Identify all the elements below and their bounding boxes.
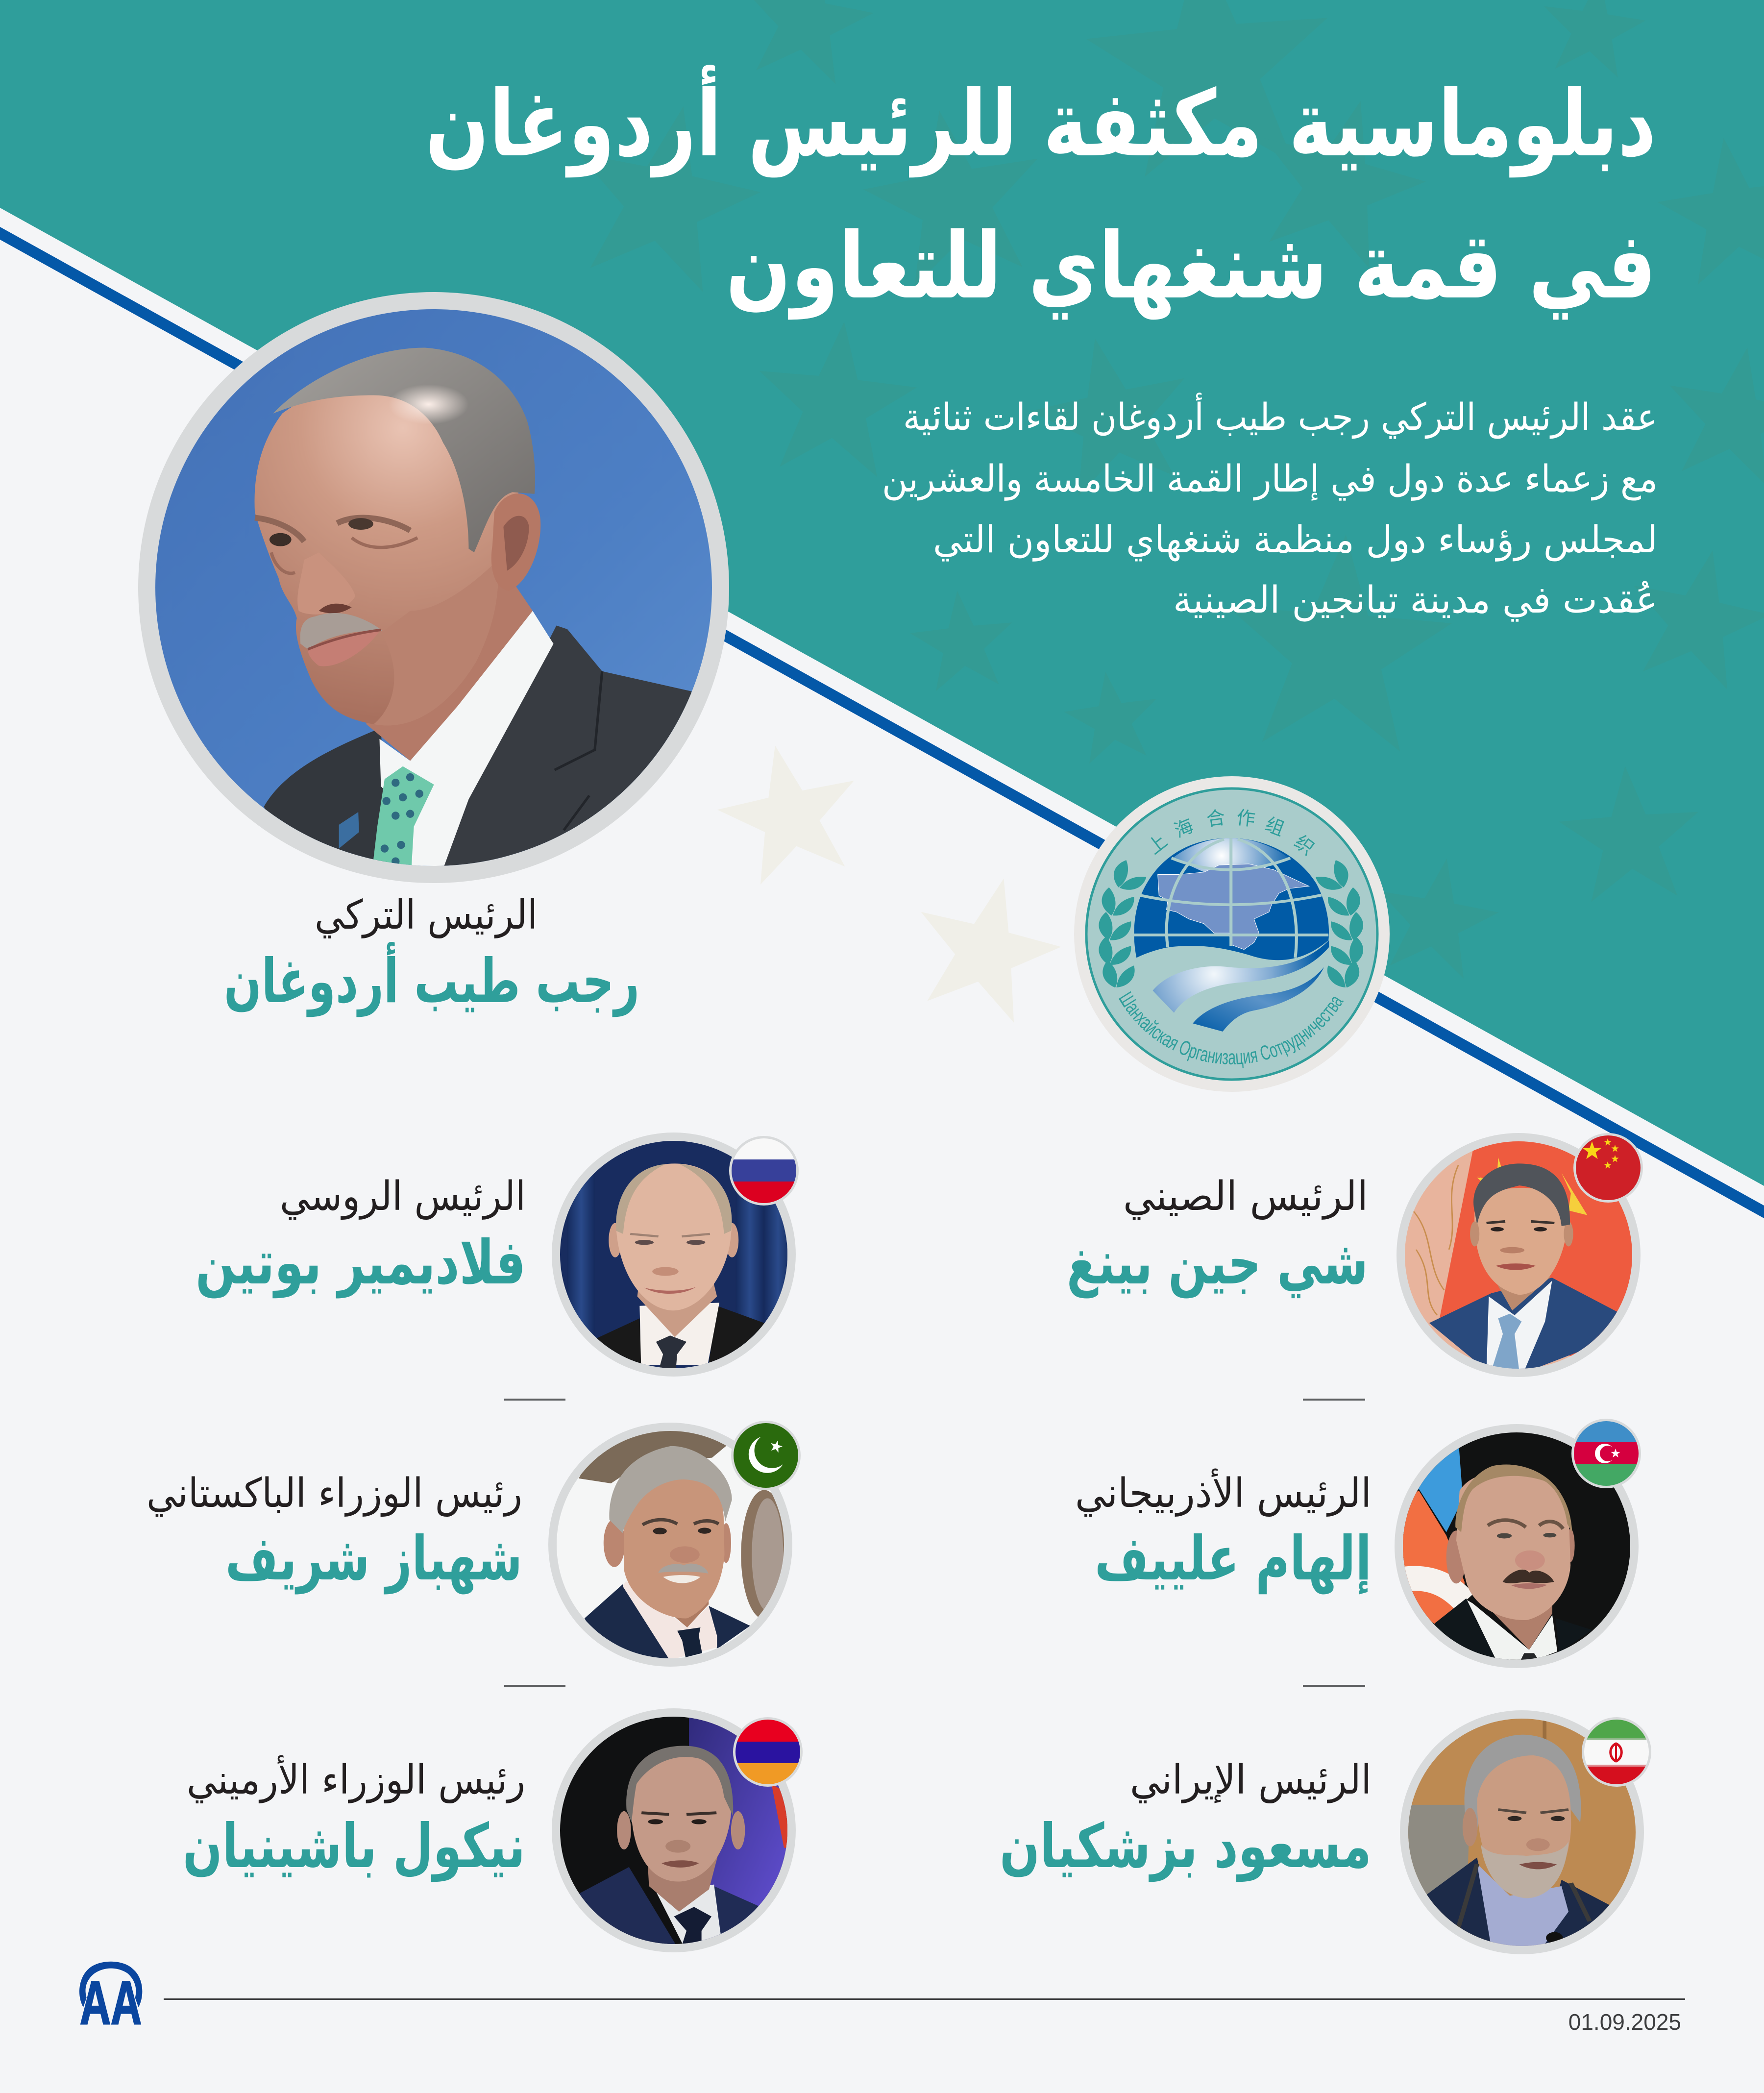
flag: Russia [729, 1136, 799, 1206]
caption: Pashinyan [183, 1755, 525, 1882]
title [425, 65, 1656, 320]
flag: Azerbaijan [1570, 1419, 1644, 1489]
divider [504, 1685, 565, 1687]
caption: Pashinyan: نيكول باشينيان [183, 1811, 525, 1882]
caption: Erdogan: الرئيس التركي [315, 892, 538, 938]
caption: Xi: شي جين بينغ [1067, 1228, 1368, 1299]
date: 01.09.2025 [1568, 2009, 1681, 2035]
person: Pezeshkian [980, 1700, 1676, 1965]
logo: Shanghai Cooperation Organisation: 织 [1290, 827, 1321, 860]
logo: Shanghai Cooperation Organisation: 作 [1235, 802, 1257, 831]
divider [1303, 1399, 1365, 1401]
intro paragraph: لمجلس رؤساء دول منظمة شنغهاي للتعاون التي [933, 517, 1658, 562]
flag: Iran [1582, 1717, 1651, 1787]
portrait: Erdogan [138, 292, 729, 883]
caption: Putin: فلاديمير بوتين [196, 1228, 526, 1299]
caption: Putin [196, 1173, 526, 1299]
flag: Pakistan [731, 1421, 801, 1490]
portrait: Pezeshkian [1393, 1707, 1655, 1956]
logo: Shanghai Cooperation Organisation: 组 [1262, 809, 1289, 841]
caption: Aliyev [1075, 1469, 1372, 1595]
panel: teal header band with stars and diagonal blue line [0, 0, 1764, 1218]
logo: Shanghai Cooperation Organisation: 上 [1141, 827, 1172, 859]
person: Aliyev [1075, 1419, 1641, 1668]
intro paragraph: عقد الرئيس التركي رجب طيب أردوغان لقاءات ثنائية [903, 393, 1658, 439]
divider [504, 1399, 565, 1401]
person: Putin [196, 1133, 799, 1377]
caption: Erdogan [224, 892, 639, 1017]
intro paragraph: عُقدت في مدينة تيانجين الصينية [1173, 578, 1658, 622]
caption: Xi: الرئيس الصيني [1123, 1173, 1368, 1220]
portrait: Putin [548, 1133, 802, 1378]
portrait: Xi [1393, 1133, 1646, 1378]
flag: Armenia [733, 1717, 804, 1788]
caption: Aliyev: الرئيس الأذربيجاني [1075, 1469, 1372, 1517]
logo: Shanghai Cooperation Organisation: Шанхайская Организация Сотрудничества [1119, 991, 1344, 1068]
footer rule [164, 1998, 1685, 2000]
caption: Putin: الرئيس الروسي [280, 1173, 526, 1220]
intro paragraph [882, 393, 1658, 622]
caption: Pezeshkian [1000, 1757, 1372, 1882]
flag: China [1573, 1133, 1643, 1203]
caption: Sharif: شهباز شريف [225, 1524, 522, 1595]
caption: Pezeshkian: مسعود بزشكيان [1000, 1811, 1372, 1882]
caption: Aliyev: إلهام علييف [1095, 1524, 1372, 1595]
caption: Sharif: رئيس الوزراء الباكستاني [147, 1470, 522, 1517]
logo: Shanghai Cooperation Organisation [1074, 776, 1390, 1092]
person: Pashinyan [98, 1700, 813, 1965]
caption: Pashinyan: رئيس الوزراء الأرميني [187, 1755, 525, 1803]
divider [1303, 1685, 1365, 1687]
caption: Pezeshkian: الرئيس الإيراني [1130, 1757, 1372, 1804]
portrait: Sharif [548, 1423, 793, 1667]
person: Sharif [98, 1411, 813, 1676]
intro paragraph: مع زعماء عدة دول في إطار القمة الخامسة والعشرين [882, 457, 1658, 501]
caption: Xi [1067, 1173, 1368, 1299]
person: Xi Jinping [1067, 1133, 1643, 1377]
caption: Sharif [147, 1470, 522, 1595]
logo: Shanghai Cooperation Organisation: 海 [1169, 811, 1197, 843]
portrait: Pashinyan [544, 1707, 804, 1956]
logo: Shanghai Cooperation Organisation: 合 [1204, 802, 1226, 832]
portrait: Aliyev [1395, 1424, 1639, 1668]
